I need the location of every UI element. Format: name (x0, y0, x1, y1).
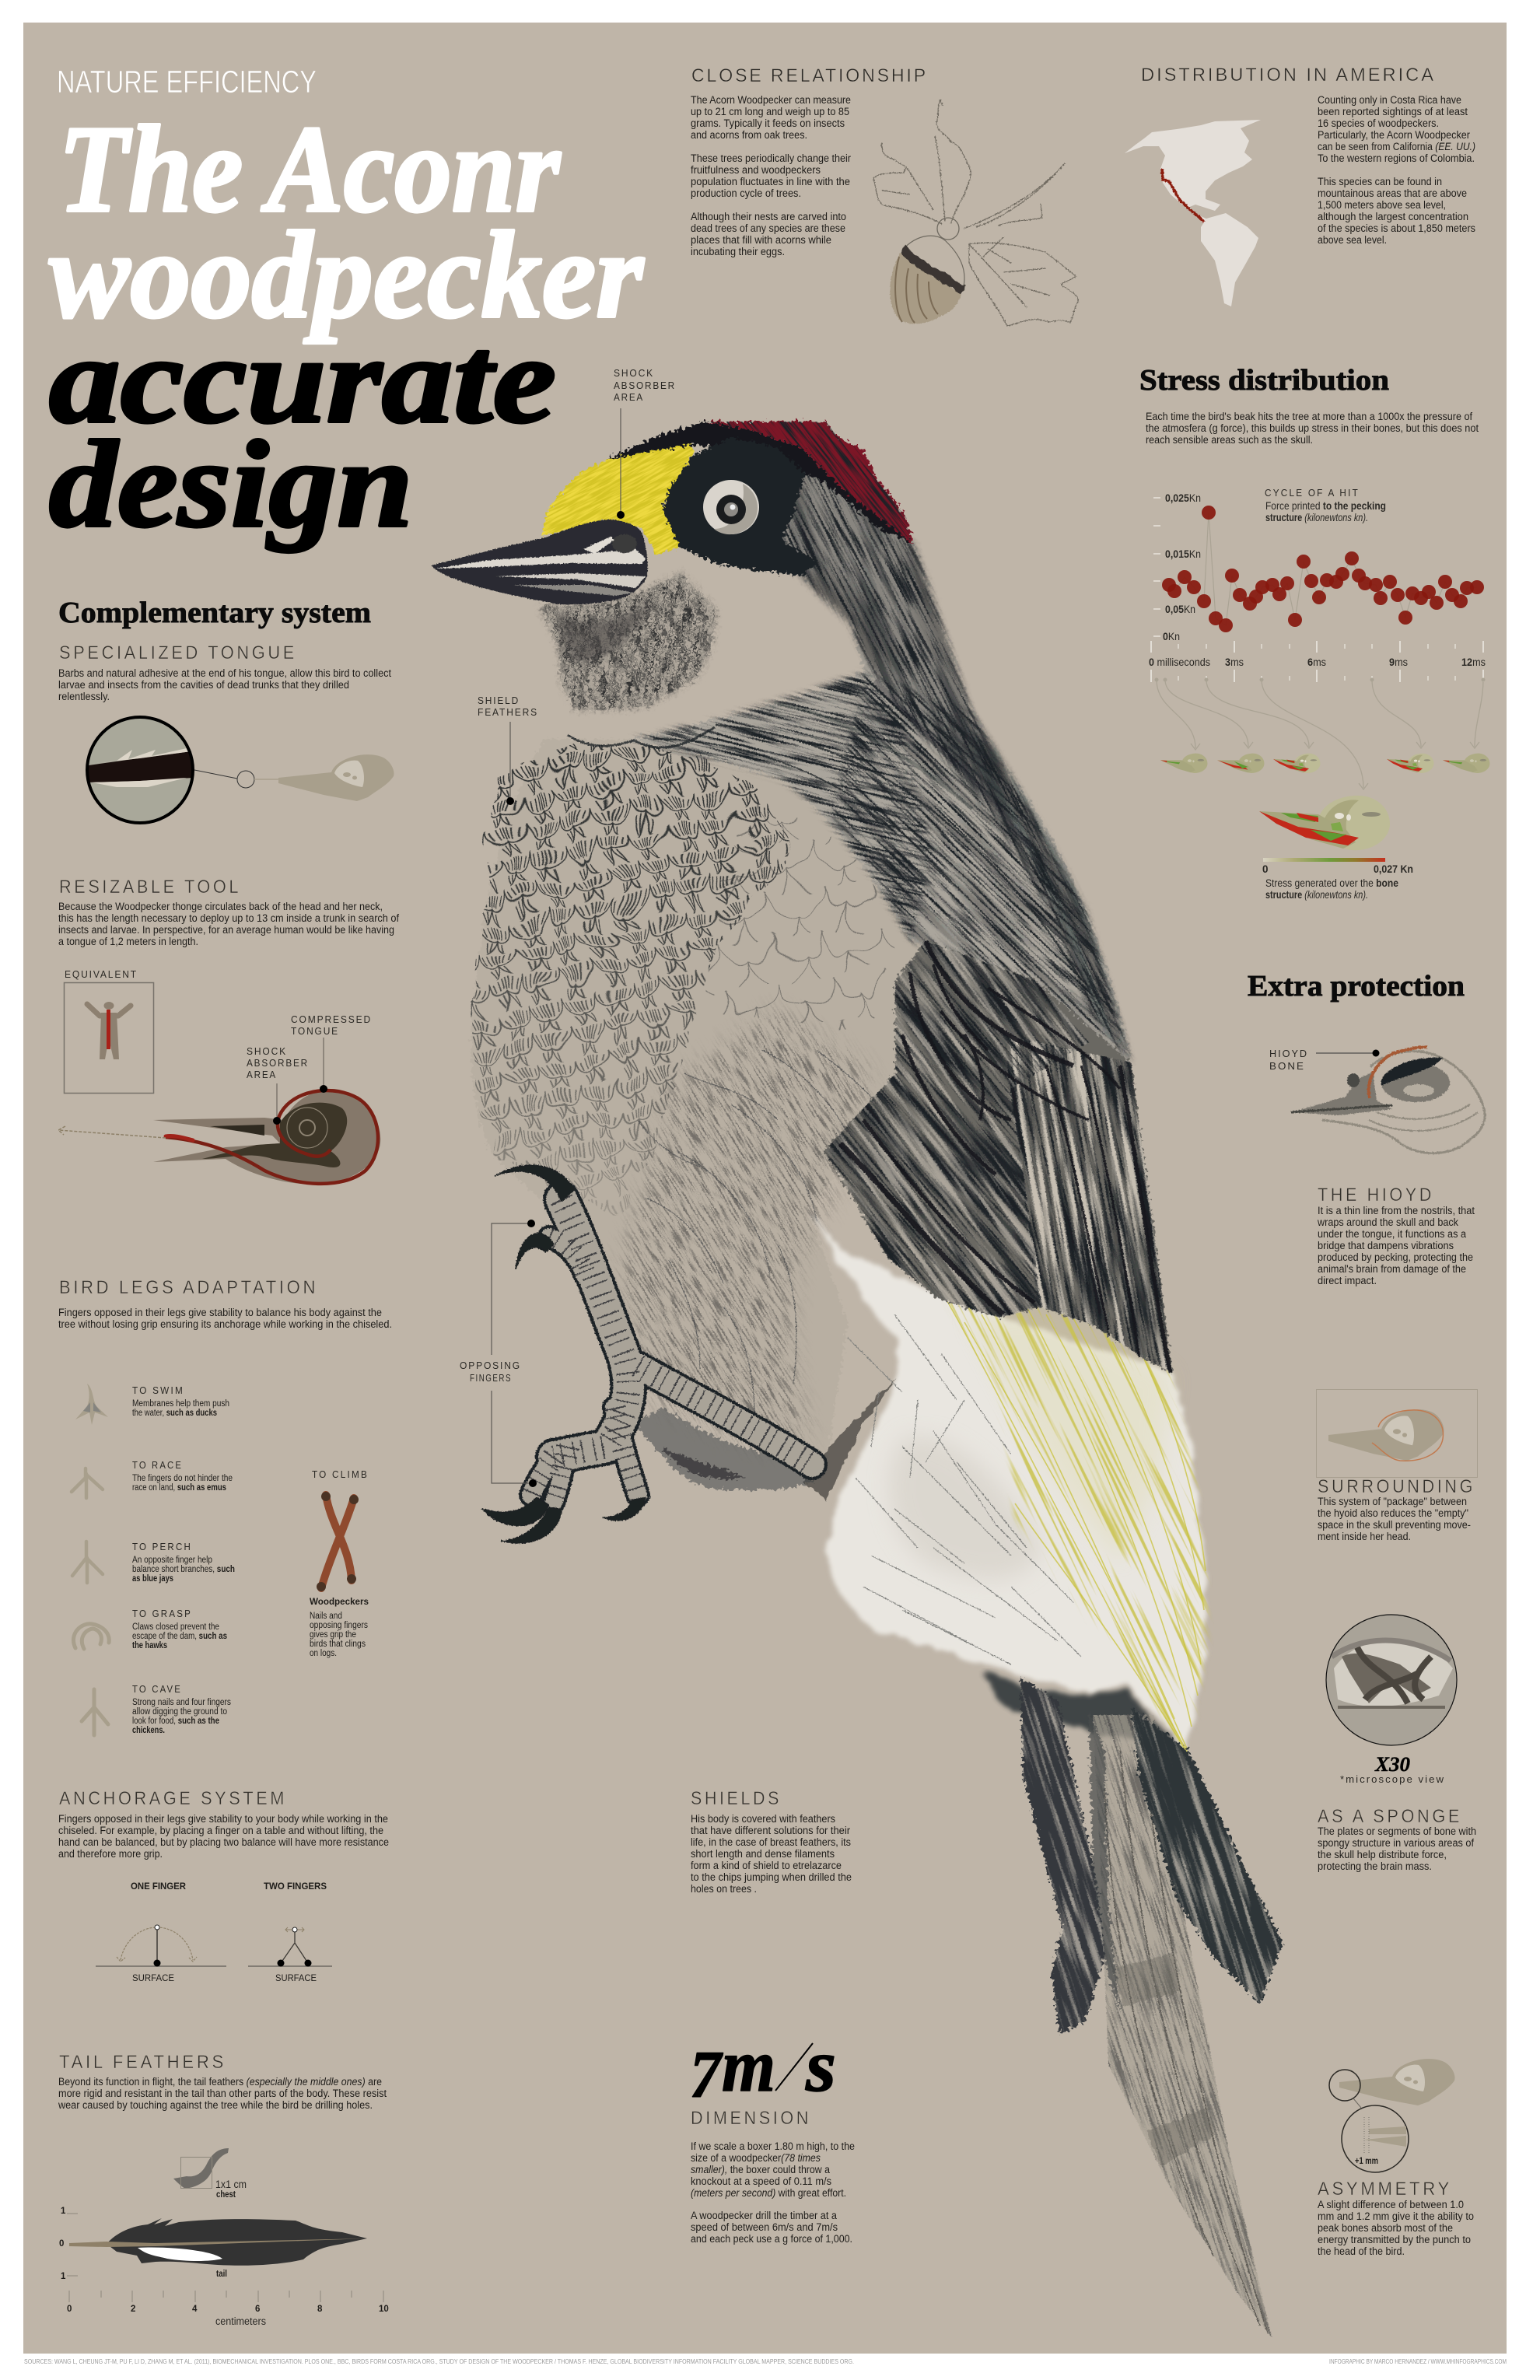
panel: shields (691, 1788, 852, 1895)
callout: shield feathers: FEATHERS (478, 706, 538, 718)
illustration: hyoid skull sketch (1291, 1047, 1485, 1153)
heading: stress distribution: Stress distribution (1139, 364, 1389, 397)
panel: the hioyd: animal's brain from damage of the (1318, 1263, 1466, 1275)
callout: compressed tongue: COMPRESSED (291, 1013, 372, 1025)
panel: shields: His body is covered with feathers (691, 1813, 835, 1825)
panel: the hioyd: direct impact. (1318, 1275, 1377, 1286)
stat: 7m/s dimension: If we scale a boxer 1.80 m high, to the (691, 2140, 855, 2152)
callout: shield feathers: SHIELD (478, 695, 520, 706)
chart: cycle of a hit: 0,025Kn (1165, 492, 1201, 504)
panel: distribution in america: although the largest concentration (1318, 211, 1468, 222)
panel: shields: that have different solutions for their (691, 1825, 850, 1836)
bird: central tail feathers (824, 1580, 1509, 2380)
chart: tail feather scale: 1 (61, 2272, 66, 2281)
panel: anchorage system: Fingers opposed in their legs give stability to your body while working in the (58, 1813, 388, 1825)
callout: shock absorber area: ABSORBER (614, 380, 676, 391)
icon: tongue microscope view (87, 717, 394, 823)
chart: cycle of a hit: 0,015Kn (1165, 548, 1201, 560)
panel: close relationship: The Acorn Woodpecker can measure (691, 94, 851, 106)
panel: close relationship: These trees periodically change their (691, 152, 851, 164)
bird: beak (431, 520, 648, 604)
icon: chest feather: chest (216, 2190, 236, 2200)
item: to cave: TO CAVE (132, 1683, 182, 1695)
panel: distribution in america: mountainous areas that are above (1318, 187, 1467, 199)
item: to cave: chickens. (132, 1726, 165, 1735)
chart: cycle of a hit: 0 milliseconds (1149, 656, 1210, 668)
item: to race (72, 1459, 233, 1498)
panel: bird legs adaptation (58, 1277, 392, 1735)
panel: asymmetry: mm and 1.2 mm give it the ability to (1318, 2210, 1474, 2222)
heading: stress distribution: the atmosfera (g force), this builds up stress in their bones, but this does not (1146, 422, 1479, 434)
panel: surrounding (1316, 1389, 1478, 1542)
panel: close relationship: incubating their eggs. (691, 246, 785, 257)
panel: as a sponge: *microscope view (1340, 1773, 1445, 1785)
item: to perch: TO PERCH (132, 1541, 192, 1552)
callout: shield feathers (478, 695, 538, 805)
chart: cycle of a hit: 0Kn (1163, 631, 1180, 642)
panel: asymmetry: +1 mm (1355, 2157, 1378, 2166)
skull: peak stress with legend: 0,027 Kn (1374, 863, 1413, 875)
item: to climb, woodpeckers: gives grip the (310, 1630, 356, 1640)
icon: human equivalent (64, 968, 154, 1094)
illustration: acorn and oak leaves (873, 100, 1078, 326)
callout: hioyd bone: BONE (1269, 1060, 1305, 1072)
chart: cycle of a hit (1149, 487, 1486, 682)
item: to grasp: TO GRASP (132, 1608, 192, 1619)
chart: tail feather scale: 10 (379, 2305, 389, 2314)
panel: anchorage system: and therefore more grip. (58, 1848, 163, 1860)
illustration: woodpecker (86, 418, 1453, 2337)
stat: 7m/s dimension: size of a woodpecker(78 times (691, 2152, 821, 2164)
callout: shock absorber area (614, 367, 676, 519)
heading: complementary system: Complementary system (58, 597, 371, 629)
footer: credit: INFOGRAPHIC BY MARCO HERNANDEZ / WWW.MHINFOGRAPHICS.COM (1329, 2358, 1507, 2365)
stat: 7m/s dimension: m (722, 2024, 775, 2107)
bird: belly hatching (614, 1005, 875, 1454)
diagram: two fingers: TWO FINGERS (264, 1882, 327, 1892)
panel: as a sponge: The plates or segments of bone with (1318, 1825, 1476, 1837)
callout: compressed tongue: TONGUE (291, 1025, 339, 1037)
item: to cave: allow digging the ground to (132, 1707, 227, 1717)
bird: throat fluff (537, 569, 721, 716)
bird: neck streaks (632, 471, 1134, 1062)
panel: tail feathers (58, 2052, 389, 2327)
bird: dark tail feathers (1020, 1678, 1283, 2034)
bird: black eye mask (663, 437, 817, 576)
bird: collar strokes (568, 681, 1081, 980)
item: to perch (72, 1541, 235, 1584)
icon: bone microscope view (1326, 1615, 1457, 1745)
bird: upper chest feather outlines (700, 793, 894, 1034)
panel: bird legs adaptation: Fingers opposed in their legs give stability to balance his body against the (58, 1307, 382, 1318)
chart: tail feather scale (59, 2207, 389, 2327)
skull: peak stress with legend (1259, 796, 1413, 901)
item: to climb, woodpeckers (310, 1468, 369, 1658)
diagram: one finger: ONE FINGER (131, 1882, 187, 1892)
item: to climb, woodpeckers: Nails and (310, 1612, 342, 1621)
icon: chest feather (173, 2148, 247, 2200)
item: to race: The fingers do not hinder the (132, 1474, 233, 1483)
panel: shields: holes on trees . (691, 1883, 757, 1895)
panel: tail feathers: Beyond its function in flight, the tail feathers (especially the middle ones) are (58, 2076, 382, 2088)
panel: distribution in america (1141, 65, 1475, 246)
panel: distribution in america: of the species is about 1,850 meters (1318, 222, 1475, 234)
bird: yellow tail coverts (604, 1013, 1540, 2090)
panel: close relationship: production cycle of trees. (691, 187, 801, 199)
item: to swim: TO SWIM (132, 1384, 184, 1396)
callout: opposing fingers (460, 1220, 537, 1487)
panel: the hioyd (1317, 1185, 1475, 1286)
panel: resizable tool: this has the length necessary to deploy up to 13 cm inside a trunk in search of (58, 912, 399, 924)
item: to swim: Membranes help them push (132, 1399, 229, 1409)
bird: belly shadow (801, 1377, 898, 1501)
panel: resizable tool: RESIZABLE TOOL (59, 877, 241, 898)
main title (49, 100, 645, 553)
panel: the hioyd: bridge that dampens vibrations (1318, 1240, 1454, 1251)
stat: 7m/s dimension: (meters per second) with great effort. (691, 2187, 846, 2199)
bird: yellow forehead (541, 445, 695, 555)
panel: close relationship: dead trees of any species are these (691, 222, 845, 234)
item: to grasp: escape of the dam, such as (132, 1632, 227, 1641)
bird: yellow feather strokes (468, 340, 790, 649)
panel: tail feathers: wear caused by touching against the tree while the bird be drilling holes. (58, 2099, 373, 2111)
panel: close relationship (691, 65, 928, 257)
skull: peak stress with legend: 0 (1262, 863, 1269, 875)
panel: surrounding: SURROUNDING (1318, 1476, 1475, 1497)
callout: shock absorber on skull: AREA (247, 1069, 277, 1080)
panel: asymmetry: A slight difference of between 1.0 (1318, 2199, 1464, 2210)
skull frames: stress over time (1160, 754, 1489, 773)
panel: distribution in america: Counting only in Costa Rica have (1318, 94, 1461, 106)
panel: as a sponge (1318, 1615, 1476, 1872)
stat: 7m/s dimension: 7 (690, 2037, 723, 2112)
callout: shock absorber area: SHOCK (614, 367, 654, 379)
panel: anchorage system: ANCHORAGE SYSTEM (59, 1788, 287, 1809)
chart: tail feather scale: 2 (131, 2305, 135, 2314)
chart: tail feather scale: 1 (61, 2207, 66, 2216)
diagram: skull with tongue (58, 1085, 380, 1184)
main title: woodpecker (49, 205, 645, 344)
icon: chest feather: 1x1 cm (215, 2179, 247, 2190)
chart: cycle of a hit: 6ms (1307, 656, 1326, 668)
bird: head (431, 275, 1026, 683)
item: to race: TO RACE (132, 1459, 183, 1471)
bird: eye (703, 480, 759, 534)
panel: distribution in america: been reported sightings of at least (1318, 106, 1468, 117)
panel: the hioyd: produced by pecking, protecting the (1318, 1251, 1473, 1263)
panel: surrounding: space in the skull preventing move- (1318, 1519, 1471, 1531)
bird: belly pencil strokes (638, 1050, 879, 1416)
heading: stress distribution: reach sensible areas such as the skull. (1146, 434, 1313, 446)
panel: resizable tool: a tongue of 1,2 meters in length. (58, 936, 198, 947)
item: to climb, woodpeckers: opposing fingers (310, 1621, 368, 1630)
stat: 7m/s dimension: speed of between 6m/s and 7m/s (691, 2221, 838, 2233)
callout: hioyd bone: HIOYD (1269, 1048, 1308, 1059)
main title: accurate (49, 310, 556, 449)
bird: black crown (607, 422, 913, 544)
bird: dark wing (824, 941, 1172, 1373)
panel: distribution in america: 16 species of woodpeckers. (1318, 117, 1439, 129)
stat: 7m/s dimension: knockout at a speed of 0.11 m/s (691, 2175, 831, 2187)
panel: asymmetry: peak bones absorb most of the (1318, 2222, 1453, 2234)
bird: thigh feathers (634, 1408, 824, 1489)
panel: asymmetry: the head of the bird. (1318, 2245, 1405, 2257)
bird: under tail shadow (982, 1672, 1174, 1746)
callout: shock absorber area: AREA (614, 391, 644, 403)
chart: cycle of a hit: Force printed to the pecking (1265, 500, 1386, 512)
panel: close relationship: places that fill with acorns while (691, 234, 831, 246)
item: to cave (82, 1683, 231, 1735)
panel: close relationship: up to 21 cm long and weigh up to 85 (691, 106, 849, 117)
stat: 7m/s dimension: and each peck use a g force of 1,000. (691, 2233, 852, 2245)
item: to cave: Strong nails and four fingers (132, 1698, 231, 1707)
panel: distribution in america: This species can be found in (1318, 176, 1442, 187)
chart: cycle of a hit: 9ms (1389, 656, 1408, 668)
bird: wing feather streaks (509, 685, 1484, 1588)
main title: The Aconr (58, 100, 562, 238)
panel: distribution in america: 1,500 meters above sea level, (1318, 199, 1446, 211)
chart: cycle of a hit: 0,05Kn (1165, 604, 1195, 615)
item: to race: race on land, such as emus (132, 1483, 226, 1493)
panel: as a sponge: AS A SPONGE (1318, 1806, 1462, 1827)
callout: shock absorber on skull: SHOCK (247, 1045, 287, 1057)
bird: white shading (889, 1437, 1042, 1579)
panel: the hioyd: THE HIOYD (1318, 1185, 1434, 1206)
stat: 7m/s dimension: DIMENSION (691, 2108, 811, 2129)
panel: surrounding: the hyoid also reduces the "empty" (1318, 1507, 1468, 1519)
panel: specialized tongue: SPECIALIZED TONGUE (59, 642, 297, 663)
diagram: one finger: SURFACE (132, 1974, 174, 1983)
item: to perch: An opposite finger help (132, 1556, 212, 1565)
panel: close relationship: fruitfulness and woodpeckers (691, 164, 821, 176)
item: to climb, woodpeckers: Woodpeckers (310, 1598, 369, 1607)
chart: tail feather scale: 6 (255, 2305, 260, 2314)
callout: shock absorber on skull (247, 1045, 309, 1121)
panel: as a sponge: X30 (1374, 1753, 1410, 1776)
panel: distribution in america: To the western regions of Colombia. (1318, 152, 1475, 164)
kicker: nature efficiency: NATURE EFFICIENCY (57, 64, 317, 100)
panel: close relationship: and acorns from oak trees. (691, 129, 807, 141)
bird: tail feather highlights (822, 1485, 1471, 2159)
panel: resizable tool (58, 877, 399, 1184)
bird: white undertail (809, 1210, 1207, 1754)
diagram: two fingers (248, 1882, 332, 1983)
panel: specialized tongue (58, 642, 394, 823)
main title: design (49, 415, 413, 553)
panel: distribution in america: can be seen from California (EE. UU.) (1318, 141, 1475, 152)
skull: peak stress with legend: Stress generated over the bone (1265, 877, 1398, 889)
panel: the hioyd: It is a thin line from the nostrils, that (1318, 1205, 1475, 1216)
panel: close relationship: CLOSE RELATIONSHIP (691, 65, 928, 86)
callout: hioyd bone (1269, 1048, 1380, 1072)
item: to climb, woodpeckers: TO CLIMB (312, 1468, 369, 1480)
item: to perch: as blue jays (132, 1574, 173, 1584)
panel: asymmetry: ASYMMETRY (1318, 2179, 1452, 2200)
chart: tail feather scale: 0 (67, 2305, 72, 2314)
item: to cave: look for food, such as the (132, 1717, 219, 1726)
panel: the hioyd: under the tongue, it functions as a (1318, 1228, 1466, 1240)
icon: human equivalent: EQUIVALENT (65, 968, 138, 980)
panel: distribution in america: above sea level. (1318, 234, 1387, 246)
panel: as a sponge: the skull help distribute force, (1318, 1849, 1447, 1860)
bird: neck and mantle (628, 447, 1131, 1062)
chart: tail feather scale: centimeters (215, 2315, 266, 2327)
callout: opposing fingers: OPPOSING (460, 1360, 521, 1371)
panel: resizable tool: Because the Woodpecker thonge circulates back of the head and her neck, (58, 901, 383, 912)
panel: close relationship: population fluctuates in line with the (691, 176, 850, 187)
callout: opposing fingers: FINGERS (470, 1372, 512, 1384)
bird: neck dark shading (801, 544, 1120, 1042)
panel: as a sponge: protecting the brain mass. (1318, 1860, 1432, 1872)
bird: wing feather outlines (840, 941, 1171, 1373)
panel: resizable tool: insects and larvae. In perspective, for an average human would be like having (58, 924, 394, 936)
panel: as a sponge: spongy structure in various areas of (1318, 1837, 1474, 1849)
panel: shields: life, in the case of breast feathers, its (691, 1836, 851, 1848)
callout: shock absorber on skull: ABSORBER (247, 1057, 309, 1069)
panel: asymmetry: energy transmitted by the punch to (1318, 2234, 1471, 2245)
chart: tail feather scale: 4 (192, 2305, 198, 2314)
stat: 7m/s dimension: s (805, 2024, 836, 2107)
item: to climb, woodpeckers: birds that clings (310, 1640, 366, 1649)
chart: tail feather scale: tail (216, 2270, 227, 2279)
panel: specialized tongue: Barbs and natural adhesive at the end of his tongue, allow this bird to collect (58, 667, 391, 679)
stat: 7m/s dimension (690, 2024, 855, 2245)
arrows: time points to skull frames (1154, 678, 1486, 789)
diagram: two fingers: SURFACE (275, 1974, 317, 1983)
bird: sketch lines on white (848, 1314, 1081, 1664)
map: americas with acorn woodpecker range (1125, 120, 1261, 306)
panel: anchorage system: chiseled. For example, by placing a finger on a table and without lifting, the (58, 1825, 383, 1836)
chart: cycle of a hit: 12ms (1461, 656, 1486, 668)
panel: anchorage system: hand can be balanced, but by placing two balance will have more resistance (58, 1836, 389, 1848)
heading: stress distribution (1139, 364, 1479, 446)
item: to perch: balance short branches, such (132, 1565, 235, 1574)
skull: peak stress with legend: structure (kilonewtons kn). (1265, 889, 1368, 901)
callout: compressed tongue (291, 1013, 372, 1089)
item: to climb, woodpeckers: on logs. (310, 1649, 337, 1658)
item: to swim (75, 1384, 229, 1425)
stat: 7m/s dimension: smaller), the boxer could throw a (691, 2164, 830, 2175)
panel: surrounding: ment inside her head. (1318, 1531, 1411, 1542)
chart: tail feather scale: 8 (317, 2305, 323, 2314)
item: to grasp: Claws closed prevent the (132, 1622, 219, 1632)
chart: cycle of a hit: structure (kilonewtons kn). (1265, 512, 1368, 523)
panel: bird legs adaptation: BIRD LEGS ADAPTATION (59, 1277, 318, 1298)
bird: chest scale feathers (472, 743, 789, 1213)
panel: bird legs adaptation: tree without losing grip ensuring its anchorage while working in the chiseled. (58, 1318, 392, 1330)
chart: tail feather scale: 0 (59, 2239, 64, 2249)
panel: specialized tongue: relentlessly. (58, 691, 110, 702)
stat: 7m/s dimension: A woodpecker drill the timber at a (691, 2210, 837, 2221)
item: to grasp (73, 1608, 227, 1650)
bird: red crown streaks (626, 275, 1026, 683)
panel: shields: form a kind of shield to etrelazarce (691, 1860, 842, 1871)
panel: asymmetry (1318, 2059, 1474, 2257)
panel: the hioyd: wraps around the skull and back (1317, 1216, 1458, 1228)
heading: stress distribution: Each time the bird's beak hits the tree at more than a 1000x the pressure of (1146, 411, 1472, 422)
bird: body base (471, 739, 926, 1478)
panel: distribution in america: DISTRIBUTION IN AMERICA (1141, 65, 1436, 86)
panel: shields: SHIELDS (691, 1788, 782, 1809)
diagram: one finger (96, 1882, 226, 1983)
chart: cycle of a hit: 3ms (1225, 656, 1244, 668)
panel: tail feathers: more rigid and resistant in the tail than other parts of the body. These resist (58, 2088, 387, 2099)
footer: sources: SOURCES: WANG L, CHEUNG JT-M, PU F, LI D, ZHANG M, ET AL. (2011), BIOMECHANICAL INVESTIGATION. PLOS ONE., BBC, BIRDS FORM COSTA RICA ORG., STUDY OF DESIGN OF THE WOODPECKER / THOMAS F. HENZE, GLOBAL BIODIVERSITY INFORMATION FACILITY GLOBAL MAPPER, SCIENCE BUDDIES ORG. (24, 2358, 854, 2365)
panel: close relationship: Although their nests are carved into (691, 211, 846, 222)
panel: shields: to the chips jumping when drilled the (691, 1871, 852, 1883)
panel: shields: short length and dense filaments (691, 1848, 835, 1860)
panel: close relationship: grams. Typically it feeds on insects (691, 117, 845, 129)
chart: cycle of a hit: CYCLE OF A HIT (1265, 487, 1360, 499)
item: to grasp: the hawks (132, 1641, 167, 1650)
item: to swim: the water, such as ducks (132, 1409, 217, 1418)
panel: surrounding: This system of "package" between (1318, 1496, 1467, 1507)
panel: distribution in america: Particularly, the Acorn Woodpecker (1318, 129, 1470, 141)
panel: tail feathers: TAIL FEATHERS (59, 2052, 226, 2073)
bird: red crown (705, 422, 913, 544)
bird: feet and claws (482, 1165, 812, 1543)
panel: anchorage system (58, 1788, 389, 1983)
heading: extra protection: Extra protection (1248, 970, 1465, 1003)
panel: specialized tongue: larvae and insects from the cavities of dead trunks that they drilled (58, 679, 349, 691)
